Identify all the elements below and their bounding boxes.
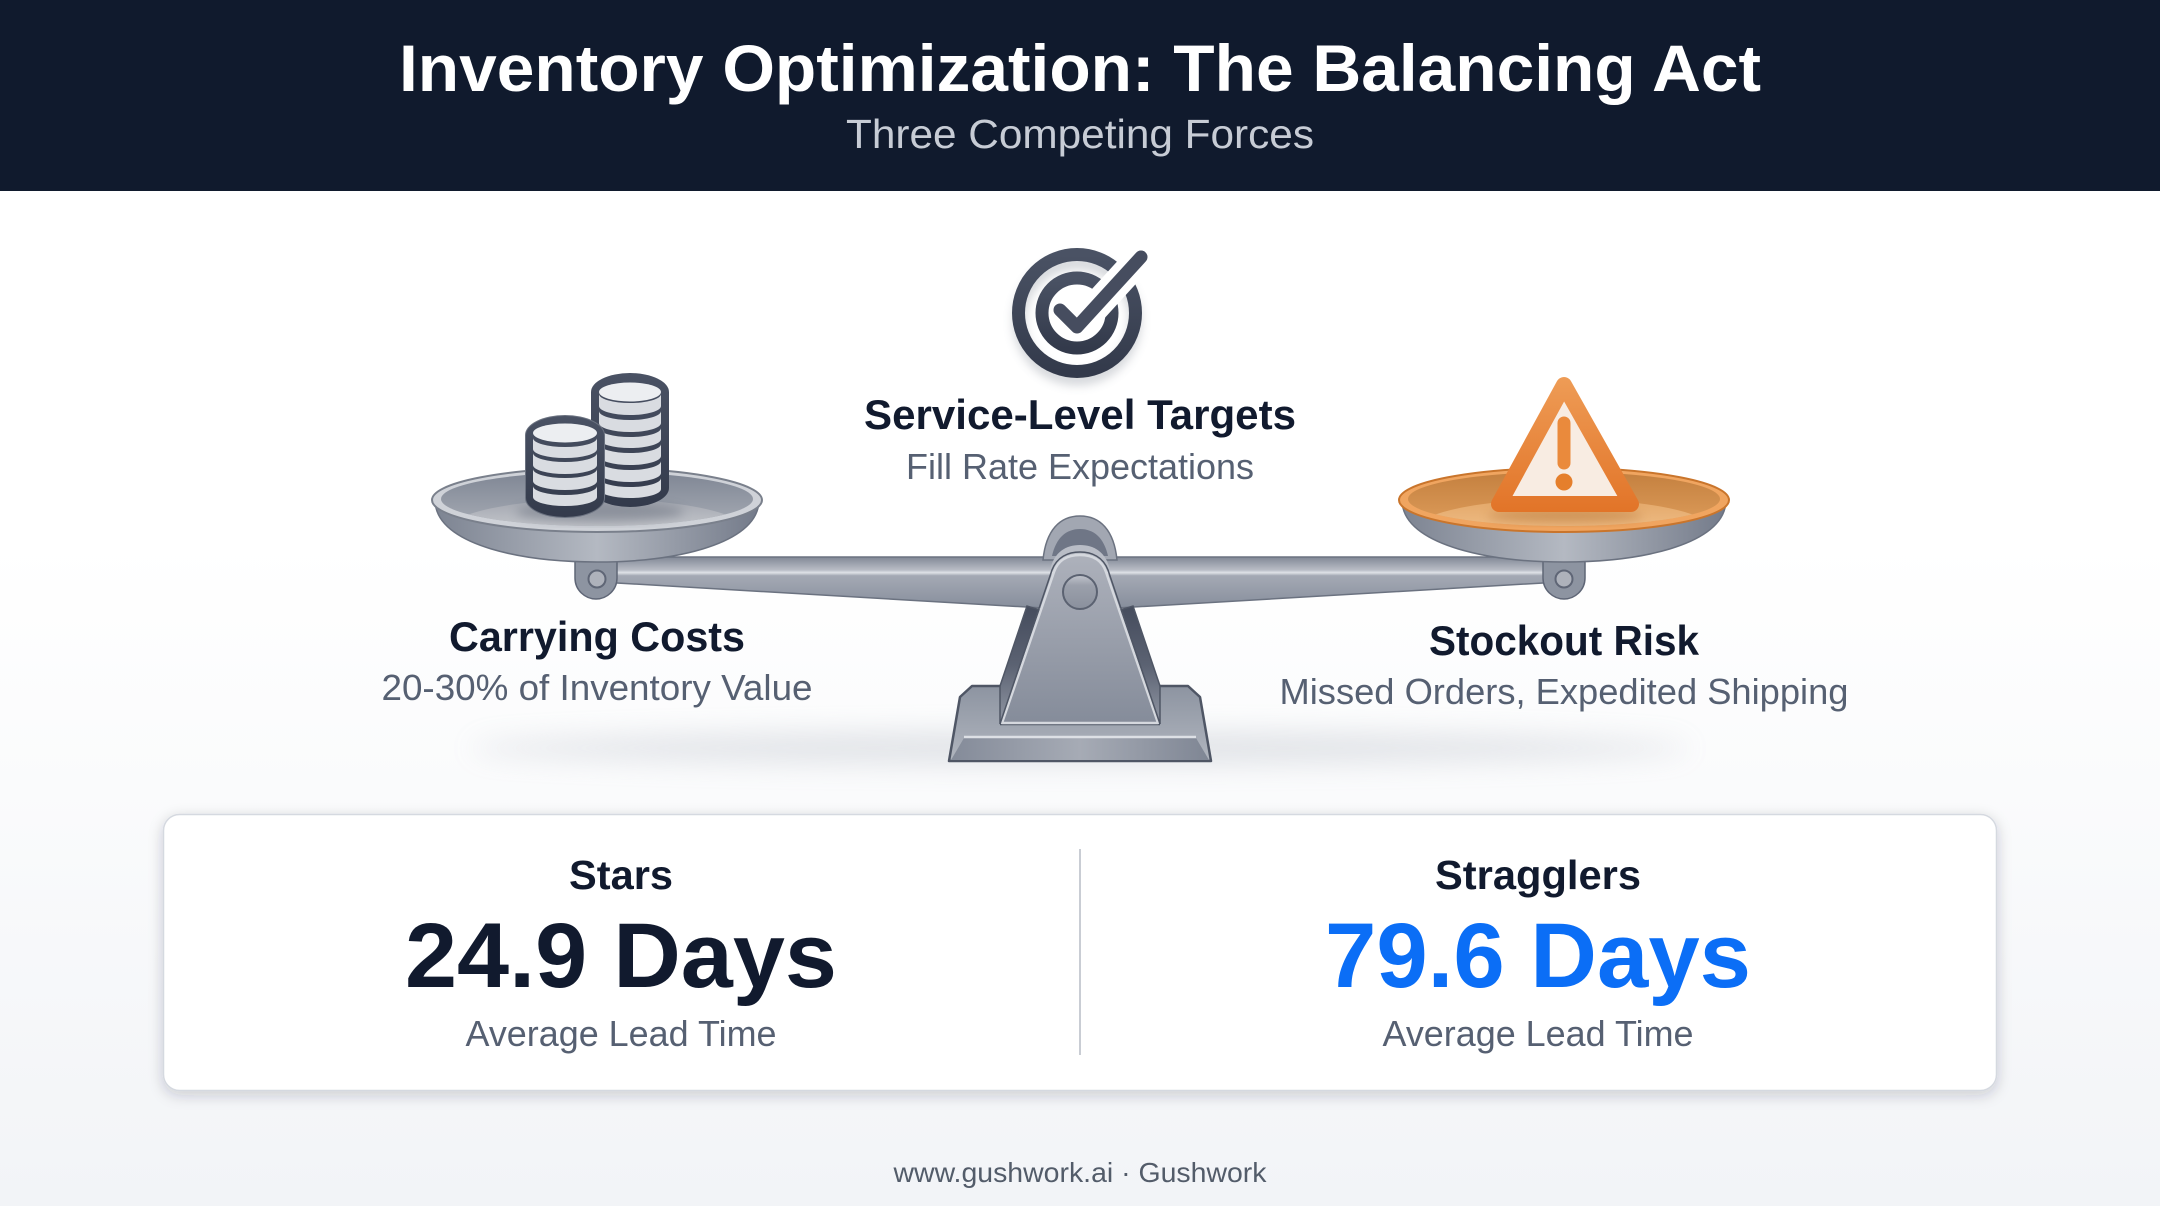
label: service-level targets: Fill Rate Expectations <box>906 446 1254 487</box>
pivot pin <box>1063 575 1097 609</box>
stragglers stat: Stragglers <box>1435 852 1641 898</box>
icon: warning triangle <box>1487 385 1643 523</box>
right lug <box>1543 555 1585 599</box>
stragglers stat <box>1325 852 1751 1054</box>
stars stat: 24.9 Days <box>405 905 837 1007</box>
footer: www.gushwork.ai · Gushwork <box>892 1157 1268 1188</box>
label: stockout risk: Missed Orders, Expedited Shipping <box>1280 671 1848 712</box>
label: stockout risk: Stockout Risk <box>1429 617 1700 664</box>
front coin stack <box>525 415 605 518</box>
title: Inventory Optimization: The Balancing Act <box>399 31 1761 105</box>
left pan <box>432 468 762 599</box>
label: service-level targets: Service-Level Targets <box>864 391 1296 438</box>
label: carrying costs: Carrying Costs <box>449 613 745 660</box>
beam <box>600 557 1560 609</box>
label: stockout risk <box>1280 617 1848 712</box>
left lug <box>575 555 617 599</box>
ground shadow <box>470 732 1690 764</box>
header band <box>0 0 2160 191</box>
stars stat: Average Lead Time <box>466 1013 776 1054</box>
fulcrum <box>949 516 1211 761</box>
back coin stack <box>591 373 669 507</box>
subtitle: Three Competing Forces <box>846 111 1314 157</box>
right pan <box>1399 468 1729 599</box>
label: carrying costs <box>382 613 812 708</box>
icon: target with checkmark <box>1018 247 1150 379</box>
icon: coin stacks <box>516 373 684 522</box>
balance scale <box>432 373 1729 761</box>
base <box>949 686 1211 761</box>
stars stat <box>405 852 837 1054</box>
panel: lead time comparison <box>164 814 1996 1090</box>
label: carrying costs: 20-30% of Inventory Value <box>382 667 812 708</box>
stragglers stat: Average Lead Time <box>1382 1013 1694 1054</box>
label: service-level targets <box>864 391 1296 487</box>
stragglers stat: 79.6 Days <box>1325 905 1751 1007</box>
stars stat: Stars <box>569 852 673 898</box>
